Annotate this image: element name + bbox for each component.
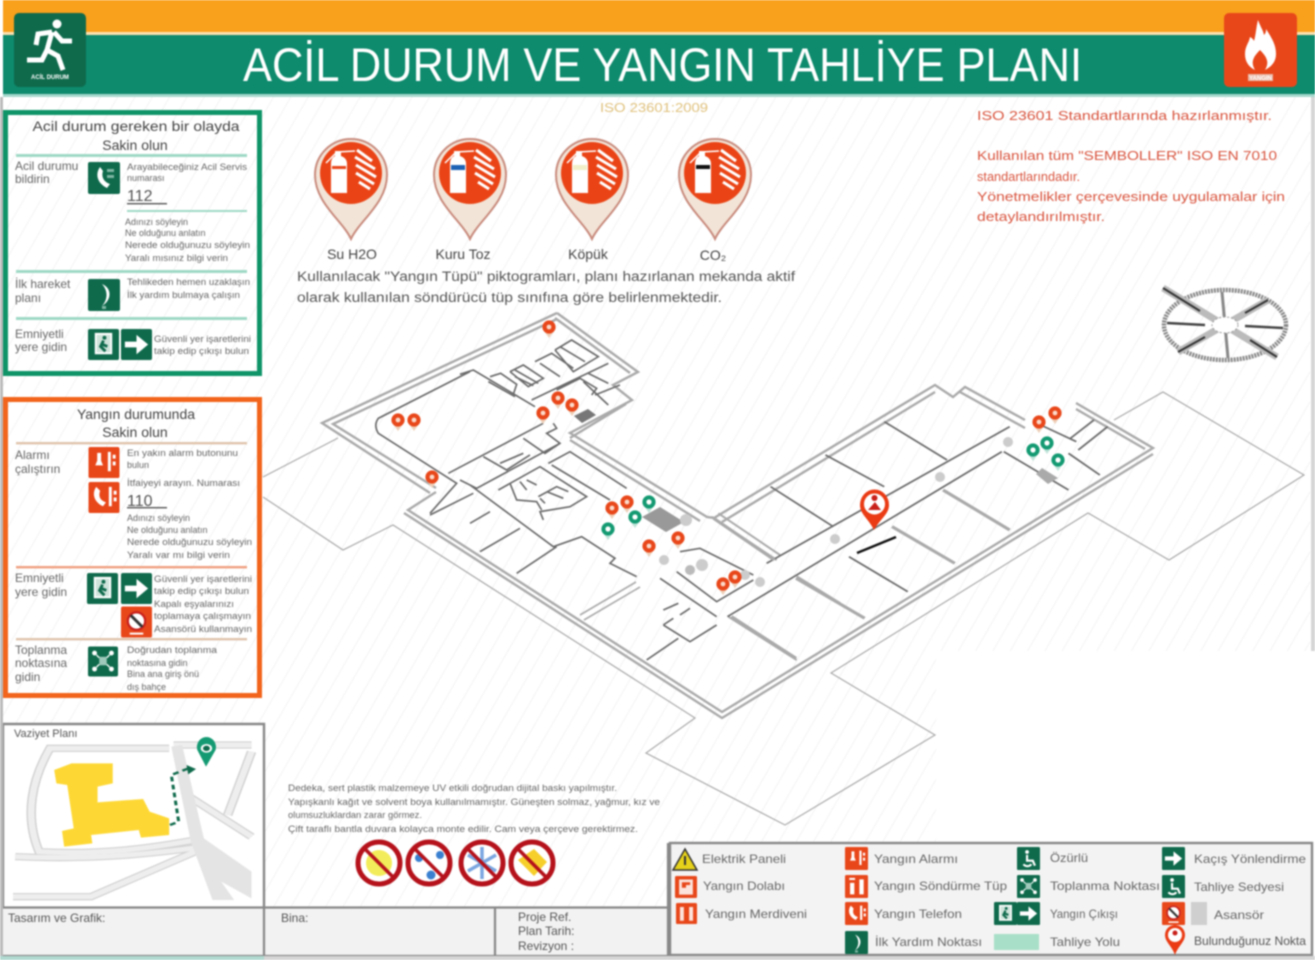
- stairs and lifts: [574, 409, 1058, 587]
- panel: fire instructions: dış bahçe: [127, 682, 166, 692]
- extinguisher explanation: Kullanılacak "Yangın Tüpü" piktogramları, planı hazırlanan mekanda aktif: [297, 269, 795, 284]
- black scale bar: [857, 537, 896, 553]
- legend: Elektrik Paneli: [702, 852, 786, 866]
- site map: [13, 737, 252, 900]
- panel: fire instructions: Asansörü kullanmayın: [154, 624, 252, 634]
- extinguisher pin: water: [315, 139, 387, 239]
- panel: fire instructions: Güvenli yer işaretlerini: [154, 574, 252, 584]
- icon: fire: YANGIN: [1249, 76, 1272, 82]
- legend: Yangın Çıkışı: [1050, 907, 1118, 921]
- interior walls west block: [376, 372, 560, 515]
- icon: emergency exit runner: ACİL DURUM: [31, 74, 69, 81]
- panel: site plan: Vaziyet Planı: [14, 728, 77, 740]
- legend: Kaçış Yönlendirme: [1194, 852, 1306, 866]
- panel: emergency instructions: Arayabileceğiniz Acil Servis: [127, 162, 248, 172]
- legend: İlk Yardım Noktası: [875, 935, 982, 949]
- panel: emergency instructions: bildirin: [15, 172, 50, 186]
- panel: fire instructions: çalıştırın: [15, 462, 60, 476]
- panel: fire instructions: Kapalı eşyalarınızı: [154, 599, 234, 609]
- extinguisher labels: Kuru Toz: [436, 246, 490, 262]
- panel: fire instructions: yere gidin: [15, 585, 67, 599]
- panel: emergency instructions: planı: [15, 291, 41, 305]
- extinguisher labels: Köpük: [568, 246, 609, 262]
- title block: Tasarım ve Grafik:: [8, 911, 105, 925]
- title: ACİL DURUM VE YANGIN TAHLİYE PLANI: [243, 38, 1082, 91]
- panel: emergency instructions: Yaralı mısınız bilgi verin: [125, 253, 228, 263]
- title block: Revizyon :: [518, 939, 574, 953]
- panel: emergency instructions: yere gidin: [15, 340, 67, 354]
- legend: Toplanma Noktası: [1050, 879, 1160, 893]
- standards note: detaylandırılmıştır.: [977, 209, 1105, 224]
- legend: Bulunduğunuz Nokta: [1194, 934, 1306, 948]
- panel: fire instructions: bulun: [127, 460, 149, 470]
- title block: Plan Tarih:: [518, 924, 574, 938]
- standards note: standartlarındadır.: [977, 169, 1080, 184]
- panel: fire instructions: gidin: [15, 670, 40, 684]
- standards note: Kullanılan tüm "SEMBOLLER" ISO EN 7010: [977, 148, 1277, 163]
- panel: emergency instructions: takip edip çıkışı bulun: [154, 346, 249, 356]
- panel: fire instructions: Ne olduğunu anlatın: [127, 525, 208, 535]
- standards note: [977, 108, 1285, 224]
- material note: olumsuzluklardan zarar görmez.: [288, 810, 422, 820]
- interior gray partition: [580, 582, 640, 620]
- icon: no sun: [358, 842, 400, 884]
- legend: Tahliye Sedyesi: [1194, 880, 1284, 894]
- extinguisher pin: dry powder: [434, 139, 506, 239]
- extinguisher pin: CO2: [679, 139, 751, 239]
- legend: Yangın Telefon: [874, 907, 962, 921]
- red fire markers: [391, 320, 1062, 595]
- panel: fire instructions: Toplanma: [15, 643, 67, 657]
- panel: emergency instructions: numarası: [127, 173, 165, 183]
- panel: fire instructions: Adınızı söyleyin: [127, 513, 190, 523]
- floor plan: [263, 313, 1304, 825]
- panel: fire instructions: Bina ana giriş önü: [127, 669, 199, 679]
- green safety markers: [601, 436, 1065, 540]
- extinguisher labels: CO₂: [700, 247, 726, 263]
- panel: fire instructions: Doğrudan toplanma: [127, 645, 217, 655]
- icon: no scratches: [511, 842, 553, 884]
- panel: emergency instructions: İlk hareket: [15, 277, 71, 291]
- title block: Bina:: [281, 911, 308, 925]
- panel: fire instructions: [6, 400, 260, 696]
- interior walls north block: [460, 340, 620, 407]
- title block: Proje Ref.: [518, 910, 571, 924]
- icon: emergency exit runner: [14, 13, 86, 87]
- interior walls right wing: [714, 420, 1108, 658]
- panel: fire instructions: takip edip çıkışı bulun: [154, 586, 249, 596]
- panel: fire instructions: Yangın durumunda: [77, 406, 195, 422]
- panel: fire instructions: noktasına: [15, 656, 67, 670]
- legend: Yangın Merdiveni: [705, 907, 807, 921]
- title block: [3, 843, 668, 956]
- panel: fire instructions: Nerede olduğunuzu söyleyin: [127, 537, 252, 547]
- icon: no snow: [461, 842, 503, 884]
- panel: emergency instructions: Ne olduğunu anlatın: [125, 228, 206, 238]
- extinguisher pin: foam: [556, 139, 628, 239]
- panel: emergency instructions: İlk yardım bulmaya çalışın: [127, 290, 240, 300]
- interior walls central block: [470, 452, 637, 577]
- compass: [1163, 288, 1286, 360]
- standards note: ISO 23601 Standartlarında hazırlanmıştır.: [977, 108, 1272, 123]
- icon: electric panel: [673, 849, 697, 870]
- panel: emergency instructions: Emniyetli: [15, 327, 64, 341]
- panel: fire instructions: toplamaya çalışmayın: [154, 611, 251, 621]
- legend: Tahliye Yolu: [1050, 935, 1120, 949]
- legend: Özürlü: [1050, 851, 1088, 865]
- icon: location pin: [1165, 925, 1185, 955]
- icon: lift: [1191, 902, 1207, 925]
- you are here pin: [860, 489, 889, 530]
- panel: emergency instructions: Adınızı söyleyin: [125, 217, 188, 227]
- interior walls south block: [630, 513, 840, 660]
- panel: emergency instructions: 112: [127, 188, 153, 205]
- header band: [3, 0, 1315, 97]
- panel: fire instructions: Yaralı var mı bilgi verin: [127, 550, 230, 560]
- panel: fire instructions: Sakin olun: [102, 424, 168, 440]
- panel: fire instructions: İtfaiyeyi arayın. Numarası: [127, 478, 240, 488]
- panel: emergency instructions: Nerede olduğunuzu söyleyin: [125, 240, 250, 250]
- standard reference: ISO 23601:2009: [600, 100, 708, 115]
- legend: Yangın Dolabı: [703, 879, 785, 893]
- panel: emergency instructions: Acil durum gereken bir olayda: [32, 118, 240, 134]
- legend: Asansör: [1214, 908, 1264, 922]
- panel: fire instructions: Emniyetli: [15, 571, 64, 585]
- panel: fire instructions: En yakın alarm butonunu: [127, 448, 238, 458]
- panel: emergency instructions: Sakin olun: [102, 137, 168, 153]
- panel: emergency instructions: Tehlikeden hemen uzaklaşın: [127, 277, 250, 287]
- icon: no rain: [408, 842, 450, 884]
- panel: fire instructions: Alarmı: [15, 448, 50, 462]
- icon: fire: [1224, 13, 1297, 87]
- legend: Yangın Söndürme Tüp: [874, 879, 1007, 893]
- legend: [670, 843, 1312, 955]
- legend: Yangın Alarmı: [874, 852, 958, 866]
- outer walls: [322, 313, 1153, 718]
- panel: emergency instructions: Acil durumu: [15, 159, 78, 173]
- extinguisher explanation: [297, 269, 795, 305]
- panel: emergency instructions: [6, 112, 260, 374]
- panel: site plan: [3, 724, 264, 907]
- extinguisher explanation: olarak kullanılan söndürücü tüp sınıfına göre belirlenmektedir.: [297, 290, 722, 305]
- material note: [288, 783, 660, 834]
- panel: emergency instructions: Güvenli yer işaretlerini: [154, 334, 251, 344]
- material note: Dedeka, sert plastik malzemeye UV etkili doğrudan dijital baskı yapılmıştır.: [288, 783, 617, 793]
- material note: Çift taraflı bantla duvara kolayca monte edilir. Cam veya çerçeve gerektirmez.: [288, 824, 638, 834]
- extinguisher labels: Su H2O: [327, 246, 377, 262]
- site outline: [263, 392, 1304, 825]
- material note: Yapışkanlı kağıt ve solvent boya kullanılmamıştır. Güneşten solmaz, yağmur, kız ve: [288, 797, 660, 807]
- panel: fire instructions: noktasına gidin: [127, 658, 188, 668]
- extinguisher labels: [327, 246, 726, 263]
- standards note: Yönetmelikler çerçevesinde uygulamalar için: [977, 189, 1285, 204]
- panel: fire instructions: 110: [127, 493, 153, 510]
